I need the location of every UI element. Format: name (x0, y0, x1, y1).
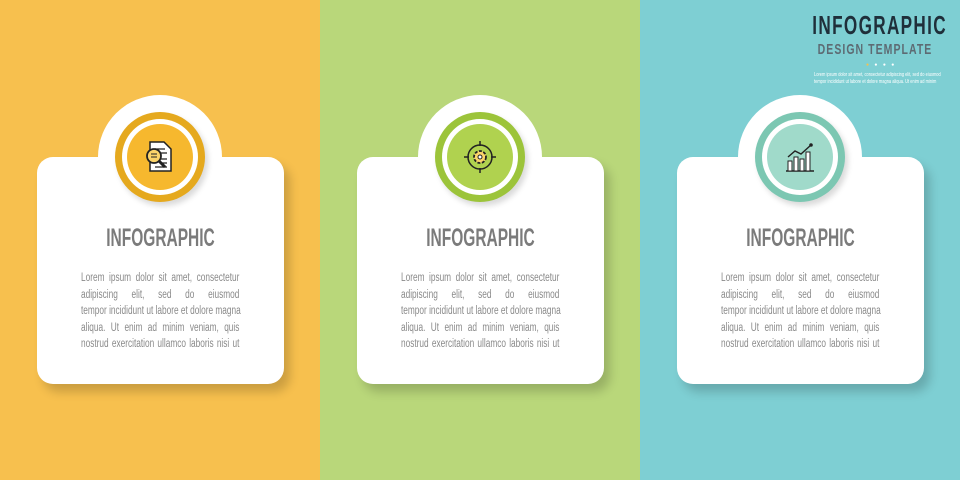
heading: INFOGRAPHIC (812, 10, 947, 40)
panel: card 3 (677, 95, 934, 396)
body text: tempor incididunt ut labore et dolore magna (721, 305, 881, 317)
icon: bar chart (738, 95, 862, 219)
background: teal column (640, 0, 960, 480)
body text: Lorem ipsum dolor sit amet, consectetur (401, 272, 559, 284)
body text: adipiscing elit, sed do eiusmod (81, 288, 239, 300)
body text: nostrud exercitation ullamco laboris nisi ut (401, 338, 559, 350)
dots: ● ● ● ● (866, 62, 896, 68)
header: top right title (812, 10, 947, 85)
body text: adipiscing elit, sed do eiusmod (721, 288, 879, 300)
icon: gear target (418, 95, 542, 219)
body text (401, 272, 561, 350)
body text: aliqua. Ut enim ad minim veniam, quis (721, 322, 879, 334)
subheading: DESIGN TEMPLATE (818, 41, 932, 58)
body text (81, 272, 241, 350)
body text: tempor incididunt ut labore et dolore magna (401, 305, 561, 317)
body text: tempor incididunt ut labore et dolore magna (81, 305, 241, 317)
body text: Lorem ipsum dolor sit amet, consectetur (81, 272, 239, 284)
body text: nostrud exercitation ullamco laboris nisi ut (721, 338, 879, 350)
body text: Lorem ipsum dolor sit amet, consectetur (721, 272, 879, 284)
background: green column (320, 0, 640, 480)
body text (721, 272, 881, 350)
title: INFOGRAPHIC (746, 224, 855, 252)
body text: adipiscing elit, sed do eiusmod (401, 288, 559, 300)
icon: document search (98, 95, 222, 219)
body text: aliqua. Ut enim ad minim veniam, quis (81, 322, 239, 334)
small text: Lorem ipsum dolor sit amet, consectetur adipiscing elit, sed do eiusmod tempor incididunt ut labore et dolore magna aliqua. Ut enim ad minim (814, 72, 941, 85)
background: orange column (0, 0, 320, 480)
panel: card 2 (357, 95, 614, 396)
title: INFOGRAPHIC (426, 224, 535, 252)
body text: nostrud exercitation ullamco laboris nisi ut (81, 338, 239, 350)
panel: card 1 (37, 95, 294, 396)
title: INFOGRAPHIC (106, 224, 215, 252)
body text: aliqua. Ut enim ad minim veniam, quis (401, 322, 559, 334)
